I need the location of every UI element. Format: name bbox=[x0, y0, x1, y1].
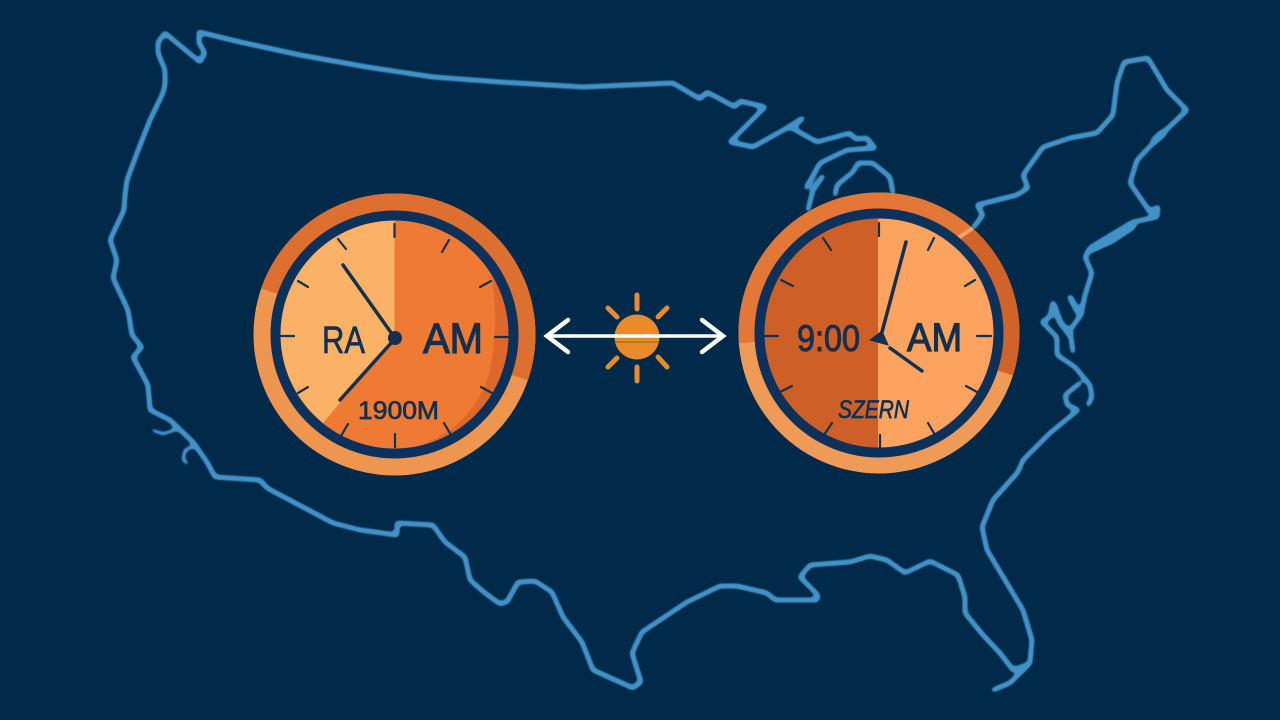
clock bezel bbox=[254, 194, 536, 476]
clock label time: 9:00 bbox=[797, 318, 860, 359]
clock label left: RA bbox=[322, 320, 366, 362]
clock face bbox=[280, 220, 508, 448]
US map outline bbox=[110, 32, 1187, 690]
clock hands bbox=[870, 242, 922, 371]
left clock bbox=[254, 194, 536, 476]
hour ticks bbox=[281, 224, 508, 447]
hour ticks bbox=[765, 223, 991, 448]
clock small label: 1900M bbox=[358, 397, 439, 425]
clock hands bbox=[340, 265, 402, 400]
right clock bbox=[738, 192, 1020, 474]
arrow: double-headed between clocks bbox=[547, 320, 723, 352]
clock label AM: AM bbox=[907, 316, 962, 360]
infographic: US map with two clocks bbox=[107, 29, 1190, 692]
clock face bbox=[764, 218, 994, 448]
clock small label: SZERN bbox=[838, 396, 910, 424]
clock bezel bbox=[738, 192, 1020, 474]
icon: sun bbox=[608, 295, 667, 381]
clock label AM: AM bbox=[423, 315, 483, 363]
